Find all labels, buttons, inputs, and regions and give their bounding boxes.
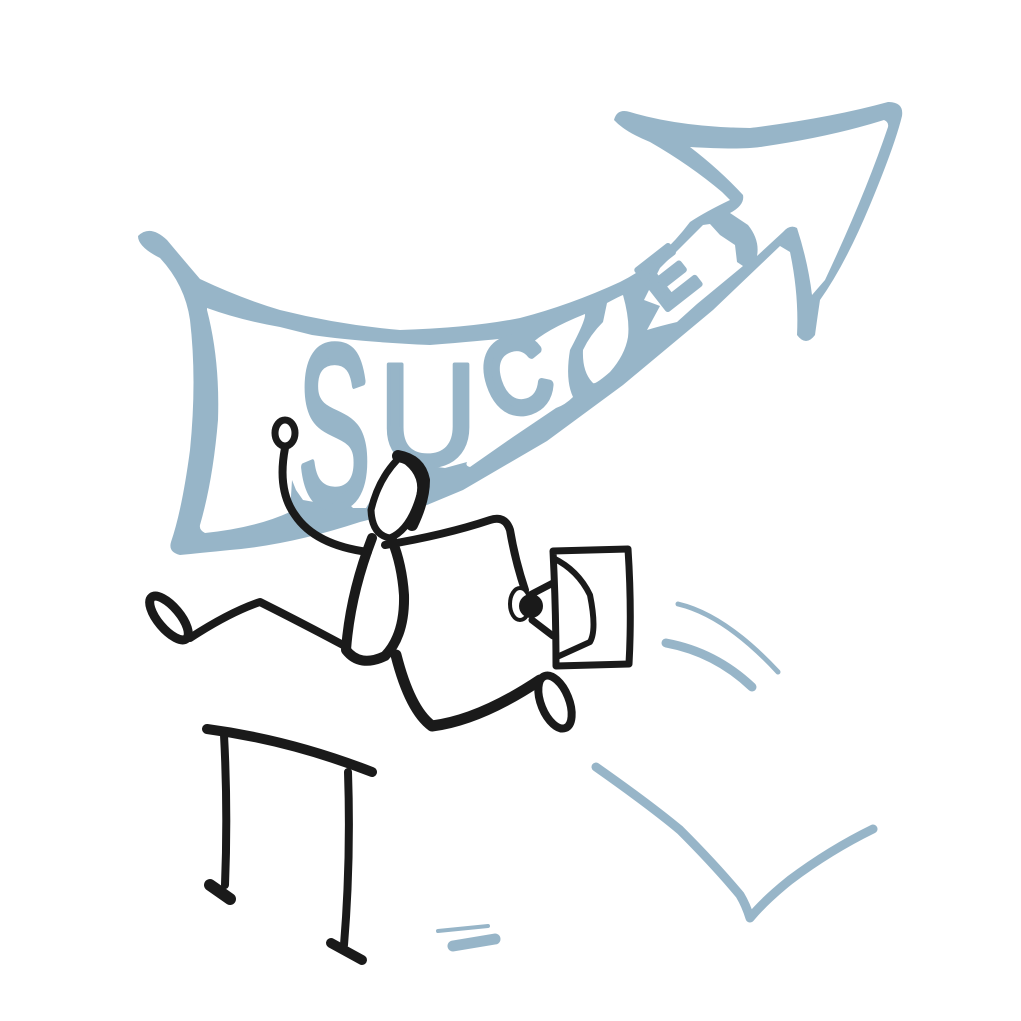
banner lettering: E <box>625 232 712 325</box>
rising arrow banner <box>138 102 902 555</box>
raised hand <box>275 420 295 446</box>
banner lettering <box>298 232 712 554</box>
arrowhead interior <box>690 120 888 295</box>
ground dashes <box>438 926 495 946</box>
carrying arm <box>385 519 525 590</box>
banner lettering: C <box>468 310 565 441</box>
figure: running businessman <box>143 420 630 733</box>
arrow outer shape <box>138 102 902 555</box>
gripping hand <box>510 588 543 620</box>
motion lines near briefcase <box>666 604 778 687</box>
front foot <box>532 671 578 733</box>
banner lettering: S <box>298 298 370 554</box>
back foot <box>143 590 195 646</box>
raised arm <box>283 448 368 552</box>
torso <box>346 538 404 661</box>
check mark <box>596 767 873 918</box>
front leg <box>396 655 540 726</box>
arrow interior gap <box>583 295 628 383</box>
arrow interior lower gap <box>644 224 743 330</box>
hurdle <box>207 729 372 960</box>
arrow interior <box>200 308 585 533</box>
briefcase <box>530 549 630 666</box>
banner lettering: U <box>378 334 478 497</box>
head <box>371 455 424 538</box>
back leg <box>190 602 343 645</box>
